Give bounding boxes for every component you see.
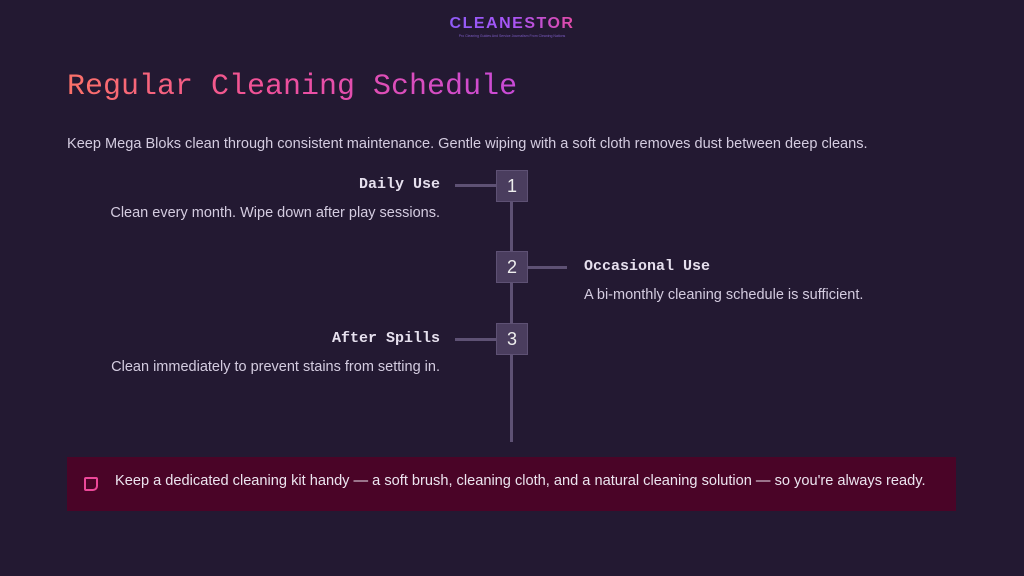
step 2: 2 (507, 257, 517, 277)
tip callout: Keep a dedicated cleaning kit handy — a soft brush, cleaning cloth, and a natural cleaning solution — so you're always ready. (115, 473, 926, 489)
item: daily use (110, 176, 440, 221)
tip callout (67, 457, 956, 511)
item: after spills: After Spills (332, 330, 440, 347)
step 3 (496, 323, 528, 355)
item: occasional use: Occasional Use (584, 258, 710, 275)
intro text: Keep Mega Bloks clean through consistent maintenance. Gentle wiping with a soft cloth removes dust between deep cleans. (67, 136, 868, 152)
item: occasional use (584, 258, 863, 303)
step 2 (496, 251, 528, 283)
item: daily use: Daily Use (359, 176, 440, 193)
title: Regular Cleaning Schedule (67, 70, 517, 104)
item: occasional use: A bi-monthly cleaning schedule is sufficient. (584, 287, 863, 303)
item: after spills (111, 330, 440, 375)
step 3: 3 (507, 329, 517, 349)
logo: Pro Cleaning Guides And Service Journalism From Cleaning Nations (459, 34, 565, 38)
step 1 (496, 170, 528, 202)
item: daily use: Clean every month. Wipe down after play sessions. (110, 205, 440, 221)
logo: CLEANESTOR (450, 15, 574, 32)
item: after spills: Clean immediately to prevent stains from setting in. (111, 359, 440, 375)
timeline (455, 170, 567, 442)
icon: note (84, 477, 98, 491)
step 1: 1 (507, 176, 517, 196)
